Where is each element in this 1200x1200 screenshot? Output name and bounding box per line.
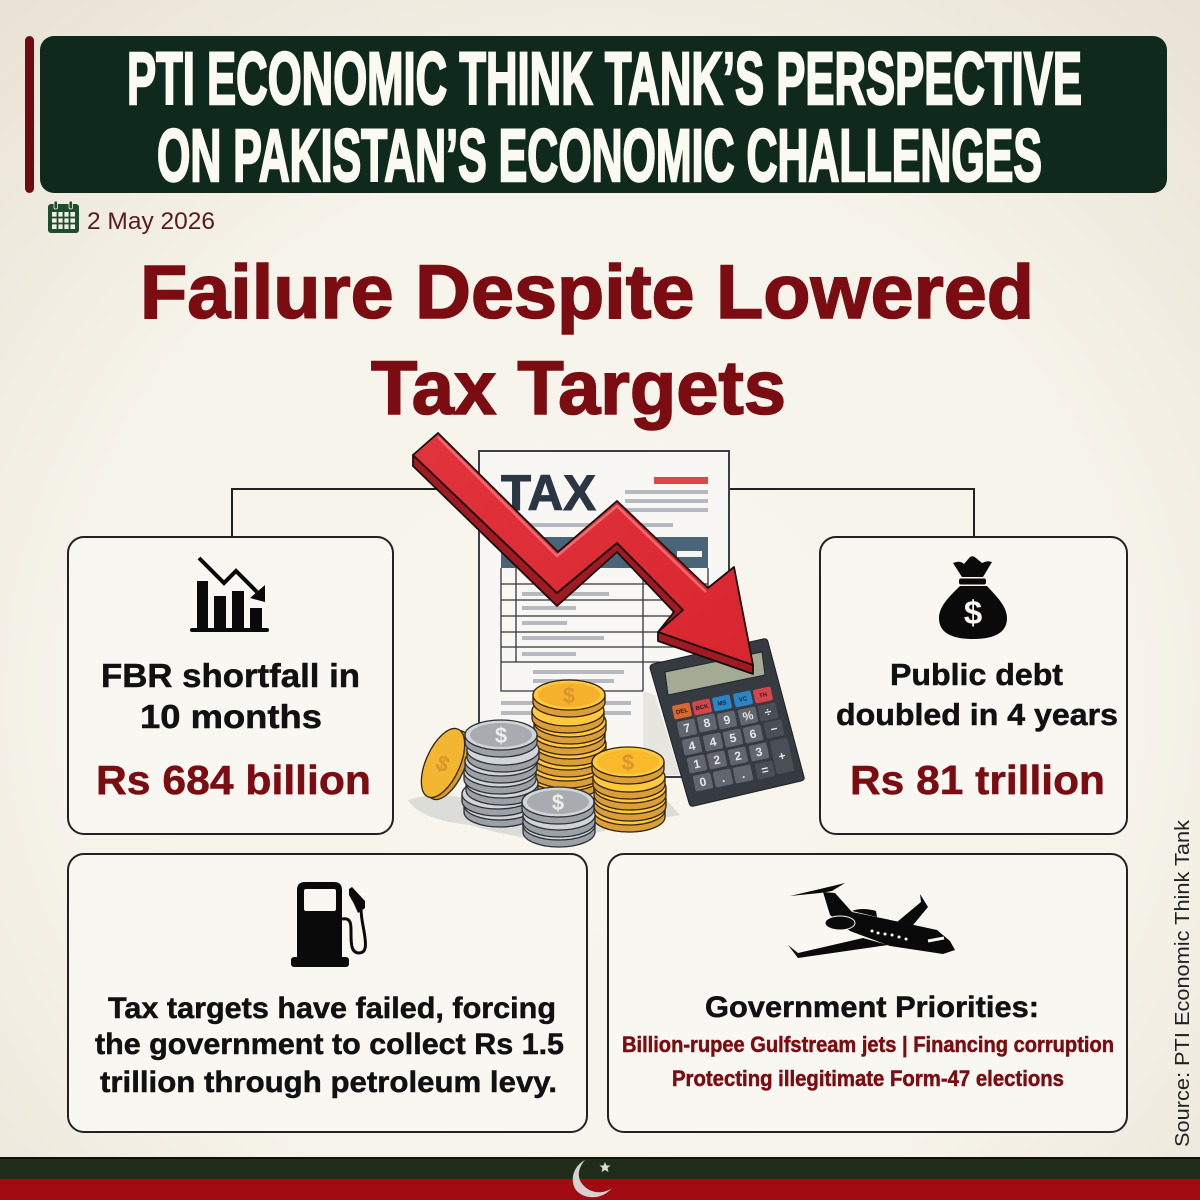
panel heading: Government Priorities: (705, 991, 1039, 1024)
calculator: 9 (722, 712, 732, 728)
coin shadow (408, 770, 680, 843)
leaning gold coin: $ (432, 750, 453, 777)
text block: trillion through petroleum levy. (100, 1066, 557, 1099)
calculator: DEL (676, 708, 689, 716)
icon: private jet (788, 883, 955, 958)
calculator: 2 (712, 752, 722, 768)
date with calendar icon: 2 May 2026 (87, 208, 215, 235)
priorities list: Protecting illegitimate Form-47 elections (672, 1066, 1064, 1091)
flag crescent (573, 1160, 612, 1197)
panel heading (101, 657, 360, 735)
priorities list: Billion-rupee Gulfstream jets | Financing corruption (622, 1032, 1114, 1057)
icon: money bag (939, 556, 1007, 639)
short gold coin stack (592, 747, 666, 832)
arrow: falling red trend (413, 433, 753, 674)
front silver coin stack (522, 787, 595, 847)
calculator: . (720, 771, 726, 785)
calculator: 0 (698, 774, 708, 790)
value: Rs 81 trillion (850, 757, 1105, 803)
calculator: + (777, 748, 787, 764)
connector left (232, 489, 482, 537)
priorities list (622, 1032, 1114, 1091)
footer flag band (0, 1157, 1200, 1200)
panel heading: doubled in 4 years (836, 697, 1118, 732)
tax document (479, 451, 729, 777)
calculator: 7 (682, 720, 692, 736)
date with calendar icon (48, 201, 215, 235)
calculator: . (740, 767, 746, 781)
calculator: − (769, 721, 779, 737)
icon: falling bar chart (190, 558, 269, 632)
calculator: 4 (687, 738, 697, 754)
text block: the government to collect Rs 1.5 (95, 1028, 564, 1061)
calculator: BCK (695, 704, 710, 712)
main heading: Tax Targets (371, 346, 786, 431)
panel: public debt (820, 537, 1127, 834)
text block: Tax targets have failed, forcing (108, 992, 556, 1025)
leaning gold coin (412, 722, 478, 806)
calculator: 6 (748, 726, 758, 742)
value: Rs 684 billion (96, 757, 371, 803)
icon: money bag: $ (964, 594, 982, 631)
calculator: 3 (754, 744, 764, 760)
header accent bar (25, 36, 34, 193)
tall gold coin stack (530, 680, 606, 798)
central illustration: tax form, coins, calculator, arrow (408, 433, 804, 847)
calculator (650, 639, 804, 806)
source credit: Source: PTI Economic Think Tank (1172, 819, 1194, 1147)
panel heading: Public debt (890, 657, 1063, 692)
silver coin stack: $ (495, 723, 507, 748)
icon: fuel pump (291, 882, 365, 967)
text block (95, 992, 564, 1099)
flag star (600, 1162, 610, 1172)
silver coin stack (462, 720, 539, 827)
short gold coin stack: $ (622, 750, 634, 775)
calculator: % (741, 708, 755, 724)
calculator: 1 (692, 756, 702, 772)
calculator: 5 (728, 730, 738, 746)
calculator: VC (739, 696, 749, 704)
panel: FBR shortfall (68, 537, 393, 834)
calculator: 4 (708, 734, 718, 750)
calculator: 8 (702, 715, 712, 731)
panel: petroleum levy (68, 854, 587, 1132)
calculator: MS (717, 700, 727, 708)
panel heading: FBR shortfall in (101, 657, 360, 694)
connector right (729, 489, 974, 537)
panel heading: 10 months (140, 698, 322, 735)
main heading: Failure Despite Lowered (140, 250, 1034, 335)
panel heading (836, 657, 1118, 732)
tax document: TAX (501, 465, 596, 521)
front silver coin stack: $ (552, 790, 564, 815)
header banner (40, 36, 1167, 197)
main heading (140, 250, 1034, 431)
calculator: 2 (733, 748, 743, 764)
panel: government priorities (608, 854, 1127, 1132)
calculator: ÷ (763, 704, 773, 720)
calculator: = (760, 762, 770, 778)
calculator: TH (759, 692, 768, 700)
tall gold coin stack: $ (563, 683, 575, 708)
